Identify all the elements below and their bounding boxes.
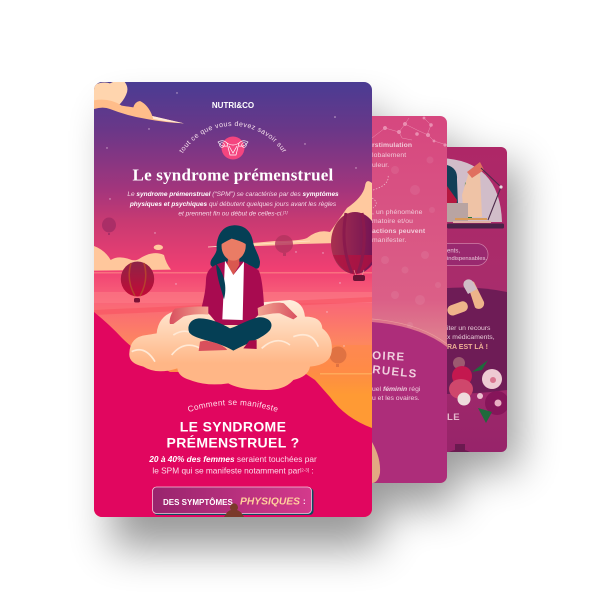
intro paragraph: physiques et psychiques qui débutent quelques jours avant les règles	[129, 201, 337, 208]
balloon: small far left	[102, 218, 116, 235]
heading: histoire	[372, 351, 416, 378]
lower dark panel	[447, 288, 507, 394]
intro paragraph	[127, 191, 339, 218]
text: féminin	[372, 386, 420, 400]
cloud left	[94, 245, 171, 271]
icon: uterus	[218, 136, 248, 160]
paragraph: [2-3]	[300, 468, 309, 472]
intro paragraph: et prennent fin ou début de celles-ci.	[178, 210, 283, 218]
panel: sky	[94, 82, 372, 517]
text: recours aux médicaments: RA EST LÀ !	[447, 342, 488, 351]
text: phénomène: manifester.	[372, 237, 406, 244]
text: phénomène: matoire et/ou	[372, 218, 413, 225]
text: surstimulation: rstimulation	[372, 142, 412, 149]
paragraph: le SPM qui se manifeste notamment par	[152, 466, 300, 476]
button: :	[303, 497, 306, 506]
page bottom icon	[449, 444, 470, 452]
button: DES SYMPTÔMES	[163, 498, 233, 507]
text: surstimulation	[372, 142, 412, 169]
intro paragraph: [1]	[282, 210, 289, 214]
lower magenta band	[372, 322, 447, 483]
cloud	[129, 300, 332, 390]
text: féminin: uel féminin régi	[372, 386, 421, 393]
button: PHYSIQUES	[240, 496, 300, 508]
shirt	[222, 261, 244, 320]
paragraph: 20 à 40% des femmes seraient touchées par	[148, 454, 317, 464]
cloud band right	[208, 181, 372, 247]
text: recours aux médicaments	[447, 326, 494, 349]
hill	[94, 312, 372, 517]
person: meditating woman	[170, 225, 297, 351]
face	[222, 239, 246, 261]
icon: pills	[446, 279, 484, 317]
text: surstimulation: lobalement	[372, 152, 406, 159]
callout pill: ents,	[447, 248, 460, 254]
drop shadows	[112, 112, 518, 548]
balloon: far center	[275, 235, 293, 256]
intro paragraph: Le syndrome prémenstruel (“SPM”) se caractérise par des symptômes	[127, 191, 339, 198]
decorative circle	[372, 442, 380, 483]
text: recours aux médicaments: iter un recours	[447, 325, 491, 332]
paragraph: :	[309, 466, 314, 476]
button	[152, 487, 314, 515]
heading: PRÉMENSTRUEL ?	[166, 434, 300, 450]
illustration: flowers	[449, 357, 509, 423]
stars	[106, 92, 357, 347]
heading: histoire: RUELS	[372, 364, 418, 381]
text: phénomène	[372, 209, 426, 244]
paragraph	[148, 454, 317, 476]
back card: third page	[447, 147, 507, 452]
arms	[170, 306, 208, 324]
balloon: large right	[331, 212, 372, 281]
text: phénomène: actions peuvent	[372, 228, 426, 235]
back card: second page	[372, 116, 447, 483]
logo: NUTRI&CO	[212, 101, 254, 110]
bubbles	[381, 156, 441, 328]
hair	[210, 225, 260, 269]
legs	[188, 317, 271, 351]
text: recours aux médicaments: x médicaments,	[447, 334, 495, 341]
heading: LE SYNDROME	[180, 418, 286, 434]
neck	[227, 258, 240, 275]
balloon: medium left	[121, 262, 154, 302]
text fragment: LE	[447, 412, 460, 423]
main card	[94, 82, 372, 517]
title: Le syndrome prémenstruel	[133, 166, 334, 184]
molecule network	[372, 117, 447, 146]
heading: histoire: OIRE	[372, 350, 406, 364]
text: phénomène: , un phénomène	[372, 209, 423, 216]
heading	[166, 418, 300, 450]
horizon bands	[94, 272, 372, 374]
jacket	[202, 262, 264, 325]
hair strand	[216, 263, 225, 299]
icon: brown shape	[224, 503, 244, 517]
text: surstimulation: uleur.	[372, 162, 389, 169]
feet	[199, 341, 227, 351]
callout pill	[447, 243, 488, 266]
text: féminin: u et les ovaires.	[372, 395, 420, 402]
subheading curved: Comment se manifeste	[188, 400, 278, 412]
clouds top left	[94, 81, 184, 123]
balloon: far small orange	[330, 346, 346, 367]
callout pill: indispensables.	[447, 256, 487, 262]
curved tagline: tout ce que vous devez savoir sur	[179, 121, 286, 153]
illustration: desk with lamp	[447, 158, 504, 228]
dotted arrow	[372, 175, 388, 208]
